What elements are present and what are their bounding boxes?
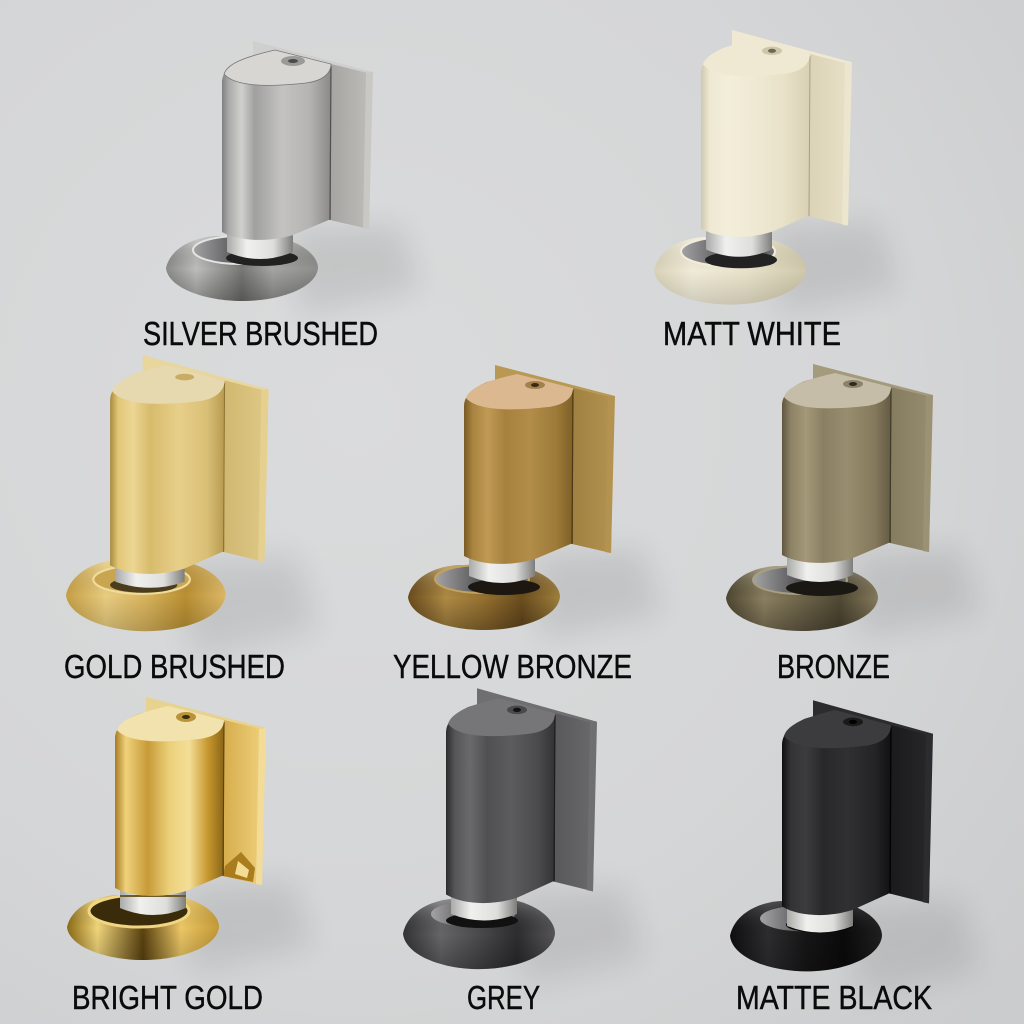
label: matt white: MATT WHITE	[663, 315, 841, 352]
label: gold brushed: GOLD BRUSHED	[64, 648, 285, 685]
product: grey	[403, 688, 644, 984]
label: grey: GREY	[467, 979, 540, 1016]
label: bright gold: BRIGHT GOLD	[72, 979, 263, 1016]
product: bronze	[726, 364, 980, 638]
label: bronze: BRONZE	[777, 648, 890, 685]
product: yellow bronze	[408, 365, 662, 639]
product: gold brushed	[66, 355, 318, 656]
label: matte black: MATTE BLACK	[736, 979, 932, 1016]
product: matt white	[654, 30, 899, 315]
product: silver brushed	[166, 41, 420, 315]
label: silver brushed: SILVER BRUSHED	[143, 315, 378, 352]
product: matte black	[730, 700, 980, 996]
product: bright gold	[67, 697, 313, 971]
label: yellow bronze: YELLOW BRONZE	[393, 648, 632, 685]
